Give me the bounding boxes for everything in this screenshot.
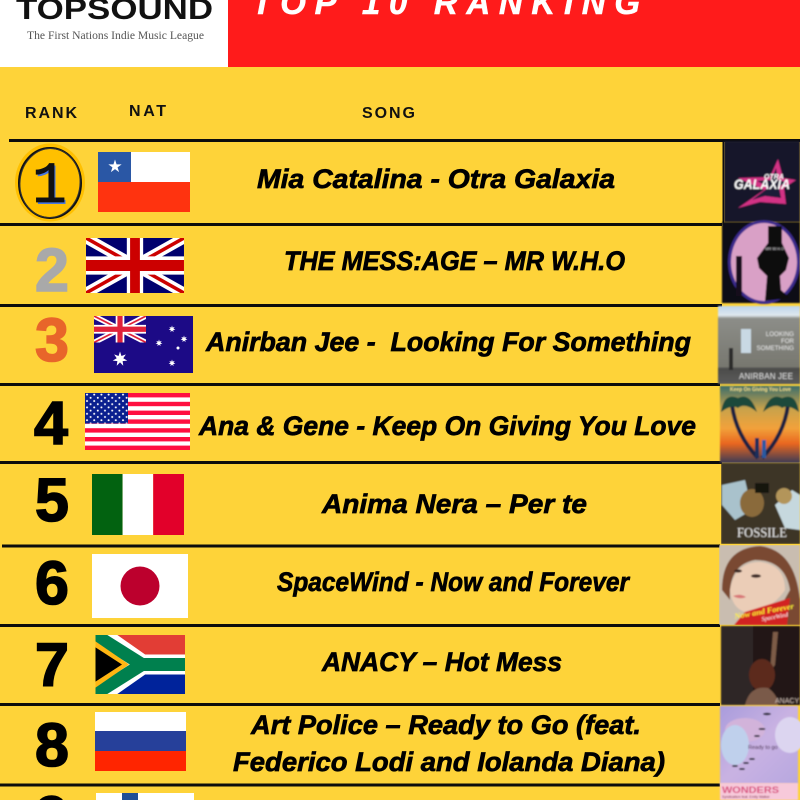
rank 7: 7	[35, 631, 69, 699]
album cover 7: Hot Mess	[721, 626, 800, 705]
album cover 9: Wonders	[720, 783, 798, 800]
flag: Finland	[96, 793, 194, 800]
rank 8: 8	[35, 711, 69, 779]
flag: South Africa	[96, 635, 185, 694]
song 2: THE MESS:AGE – MR W.H.O	[284, 246, 625, 276]
album cover 7: Hot Mess: ANACY	[775, 698, 799, 705]
song 8: Federico Lodi and Iolanda Diana)	[233, 747, 665, 777]
song 8	[233, 710, 665, 777]
rank 1 badge: 1	[32, 155, 67, 220]
column heading: nationality: NAT	[129, 103, 166, 120]
album cover 3: Looking For Something: ANIRBAN JEE	[739, 372, 793, 381]
rank 4: 4	[34, 389, 68, 457]
album cover 9: Wonders: WONDERS	[722, 785, 779, 795]
flag: Japan	[92, 554, 188, 618]
flag: United Kingdom	[86, 238, 184, 293]
logo panel	[0, 0, 228, 67]
song 8: Art Police – Ready to Go (feat.	[250, 710, 641, 740]
flag: Chile	[98, 152, 190, 212]
flag: Russia	[95, 712, 186, 771]
song 6: SpaceWind - Now and Forever	[277, 567, 630, 597]
song 3: Anirban Jee - Looking For Something	[205, 327, 691, 357]
album cover 8: Ready to Go: Ready to go	[748, 745, 778, 751]
album cover 1: Otra Galaxia: GALAXIA	[734, 176, 790, 192]
title banner	[228, 0, 800, 67]
rank 3: 3	[35, 306, 69, 374]
flag: Italy	[92, 474, 184, 535]
album cover 6: Now and Forever: Now and Forever	[733, 602, 795, 621]
song 1: Mia Catalina - Otra Galaxia	[257, 164, 615, 194]
album cover 1: Otra Galaxia: OTRA	[764, 174, 784, 181]
rank 6: 6	[35, 549, 69, 617]
column heading: rank: RANK	[25, 105, 77, 122]
album cover 1: Otra Galaxia	[724, 141, 800, 222]
album cover 2: Mr W.H.O: MR W.H.O	[765, 246, 784, 251]
flag: United States	[85, 393, 190, 450]
album cover 9: Wonders: Syndicalism feat. Emily Walker	[722, 795, 771, 799]
album cover 3: Looking For Something: FOR	[781, 338, 795, 345]
rank 1 badge	[15, 144, 85, 222]
song 5: Anima Nera – Per te	[321, 489, 587, 519]
rank 1 badge: 1	[34, 157, 68, 222]
album cover 3: Looking For Something: LOOKING	[766, 331, 794, 338]
column heading: song: SONG	[362, 105, 415, 122]
flag: Australia	[94, 316, 193, 373]
album cover 8: Ready to Go	[720, 706, 800, 784]
rank 2: 2	[35, 236, 69, 304]
song 7: ANACY – Hot Mess	[321, 647, 562, 677]
album cover 6: Now and Forever	[719, 545, 800, 625]
album cover 5: Fossile	[721, 463, 800, 544]
album cover 5: Fossile: FOSSILE	[737, 526, 787, 541]
album cover 6: Now and Forever: SpaceWind	[761, 612, 790, 623]
album cover 4: Keep On Giving You Love: Keep On Giving You Love	[730, 387, 791, 393]
album cover 3: Looking For Something	[718, 306, 800, 384]
logo tagline: The First Nations Indie Music League	[27, 28, 204, 42]
album cover 2: Mr W.H.O	[722, 220, 800, 304]
rank 5: 5	[35, 466, 69, 534]
song 4: Ana & Gene - Keep On Giving You Love	[198, 411, 696, 441]
album cover 3: Looking For Something: SOMETHING	[757, 345, 794, 352]
album cover 4: Keep On Giving You Love	[720, 386, 800, 463]
